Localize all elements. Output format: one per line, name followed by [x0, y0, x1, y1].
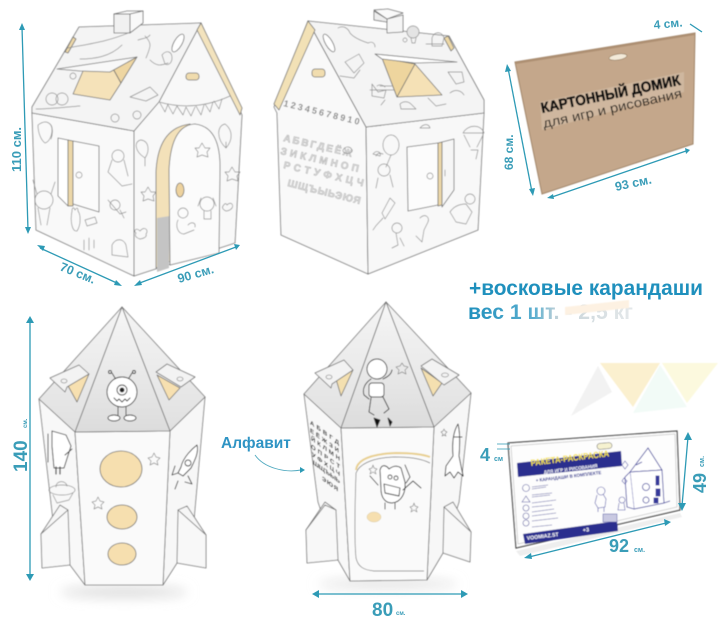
label: 70 cm: 70 см. [58, 260, 97, 287]
alphabet block: РСТУФХЦЧ [282, 160, 365, 189]
cardboard box [515, 33, 695, 194]
label: 4 cm rocket package [480, 445, 503, 465]
label: 90 cm: 90 см. [176, 262, 215, 286]
doodles on house [33, 31, 240, 257]
arrow: rocket width [312, 590, 468, 598]
back rocket left side [304, 394, 350, 581]
label: 49 cm [690, 456, 710, 493]
text: weight note: вес 1 шт. - 2,5 кг [468, 301, 633, 324]
label: 140 cm: см. [23, 418, 29, 428]
alphabet letters on rocket: ЙКЛМН [311, 434, 340, 463]
box title: КАРТОННЫЙ ДОМИК [539, 71, 682, 117]
back roof edge [274, 21, 315, 110]
package barcode [603, 514, 617, 522]
back roof window [375, 54, 457, 97]
arrow: house height [19, 23, 31, 234]
package astronaut doodles [595, 461, 628, 512]
rocket nose right [122, 307, 205, 431]
label: 4 cm package: 4 см. [653, 16, 683, 32]
alphabet letters on rocket: АБВГД [310, 420, 339, 447]
label: 4 cm rocket package: 4 [480, 445, 490, 465]
back rocket body [341, 427, 434, 581]
panel: flat house package [515, 33, 695, 194]
bunting flags [159, 96, 230, 116]
rocket shadow [60, 586, 188, 598]
house roof [32, 23, 201, 131]
alphabet block [279, 131, 365, 207]
package handle [597, 442, 612, 450]
alphabet letters on rocket: УФХЦЧ [312, 452, 340, 478]
label: 110 cm: 110 см. [9, 127, 24, 172]
rocket nose centre [75, 307, 170, 432]
label: 92 cm: см. [634, 547, 645, 554]
label: 92 cm: 92 [609, 536, 629, 556]
alphabet letters on rocket [310, 420, 341, 494]
package age mark: +3 [583, 527, 589, 534]
title banner [517, 451, 622, 477]
tick: rocket package depth [497, 444, 510, 449]
alphabet block: ЗИКЛМНОП [279, 146, 360, 175]
label: 68 cm: 68 см. [502, 134, 516, 170]
alphabet block: ШЩЪЫЬЭЮЯ [286, 178, 362, 207]
panel: rocket front view [39, 307, 206, 598]
arrow: alphabet pointer [255, 455, 305, 473]
star doodles [92, 453, 160, 509]
arrow: rocket package height [678, 432, 692, 511]
rocket left side wall [39, 399, 85, 585]
label: 49 cm: 49 [690, 473, 710, 493]
arrow: package height [505, 64, 535, 196]
rocket right side wall [163, 397, 205, 585]
panel: rocket back view [304, 302, 471, 589]
rocket left fin [41, 505, 70, 568]
back rocket right flap [421, 359, 459, 396]
back rocket door [355, 453, 430, 571]
back rocket left flap [315, 360, 353, 396]
rocket left flap [50, 365, 89, 402]
label: 80 cm: см. [396, 611, 406, 617]
rocket right flap [156, 364, 195, 400]
label: 93 cm: 93 см. [614, 173, 653, 194]
back rocket right side [427, 393, 471, 580]
label: 4 cm rocket package: см [494, 456, 503, 463]
package brand: VOOMIAZ.ST [527, 532, 560, 542]
back rocket left fin [306, 502, 338, 563]
numbers row: 12345678910 [283, 98, 361, 127]
roof handles [65, 32, 199, 80]
alphabet letters on rocket: ОПРСТ [311, 444, 341, 471]
label: 92 cm [609, 536, 645, 556]
back house roof [308, 21, 484, 127]
door arch [156, 124, 220, 272]
label: 49 cm: см. [699, 456, 706, 467]
roof window opening [57, 57, 137, 100]
alphabet letters on rocket: ЭЮЯ [322, 476, 338, 494]
arrow: house depth [37, 245, 122, 286]
back chimney [374, 9, 403, 33]
box label strip [540, 72, 684, 130]
label: alphabet: Алфавит [221, 435, 291, 452]
alphabet block: АБВГДЕЁЖ [282, 131, 354, 160]
package inner line [511, 434, 677, 544]
back rocket shadow [318, 579, 458, 589]
back window shutters [407, 139, 454, 211]
package white box [508, 431, 680, 548]
tick: package depth [690, 24, 702, 32]
alphabet letters on rocket: ШЩЪЫЬ [313, 460, 340, 485]
label: 80 cm [372, 600, 406, 621]
rocket body [75, 431, 170, 585]
label: 140 cm: 140 [11, 440, 32, 472]
arrow: rocket package width [524, 519, 671, 559]
arrow: package width [547, 148, 690, 199]
small rocket doodle [445, 424, 463, 478]
label: 140 cm [11, 418, 32, 472]
monster doodle on door [370, 465, 421, 509]
astronaut doodle [363, 359, 392, 427]
box subtitle: для игр и рисования [541, 86, 683, 131]
panel: rocket package [508, 431, 682, 556]
package shadow [516, 513, 682, 556]
back rocket nose centre [341, 302, 434, 428]
package feature list [522, 484, 558, 527]
label: 80 cm: 80 [372, 600, 393, 621]
arrow: rocket height [26, 316, 34, 581]
back rocket nose right [386, 302, 471, 427]
package crayons note: + КАРАНДАШИ В КОМПЛЕКТЕ [536, 470, 602, 483]
package bottom band [523, 521, 618, 544]
rocket doodle on right wall [172, 445, 198, 489]
package title: РАКЕТА-РАСКРАСКА [530, 448, 610, 468]
stars on back rocket [369, 363, 447, 512]
roof edge [197, 23, 242, 115]
box handle [609, 53, 627, 61]
house left wall [32, 113, 134, 276]
faded triangles [565, 300, 718, 416]
monster on nose [107, 370, 137, 421]
package rocket picture [625, 448, 670, 509]
back roof handles [312, 33, 454, 77]
panel: house back view [274, 9, 484, 274]
back house side wall [366, 113, 484, 274]
arrow: house width [134, 244, 240, 286]
panel: house front view [32, 11, 242, 276]
rocket right fin [177, 506, 206, 568]
back rocket nose left [304, 302, 386, 428]
ufo doodle [49, 482, 75, 503]
side window shutters [58, 138, 99, 212]
doodles on back house [338, 26, 484, 248]
chimney [114, 11, 143, 33]
text: wax crayons note: +восковые карандаши [469, 277, 703, 300]
house right gable wall [134, 23, 242, 276]
rocket nose left [39, 307, 122, 432]
back rocket right fin [443, 502, 471, 562]
rocket portholes [100, 451, 142, 565]
alphabet letters on rocket: ЕЁЖЗИ [310, 427, 339, 455]
back house gable wall [274, 21, 368, 274]
dinosaur doodle [48, 431, 72, 474]
package subtitle: ДЛЯ ИГР И РИСОВАНИЯ [544, 463, 598, 476]
box top edge [515, 33, 695, 64]
